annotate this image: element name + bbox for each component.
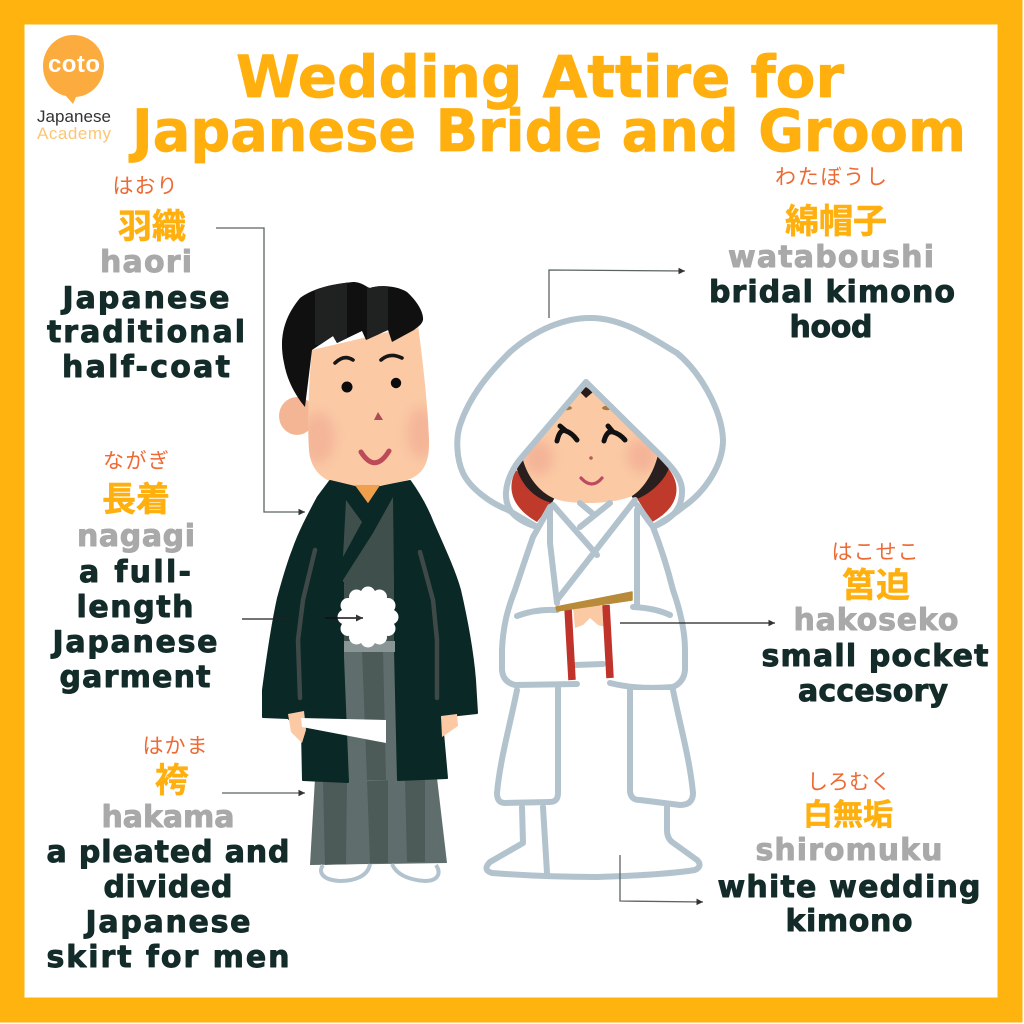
label: haori: Japanese	[60, 281, 230, 316]
label: hakama: 袴	[155, 753, 189, 802]
label: wataboushi: わたぼうし	[775, 161, 887, 191]
label: haori: はおり	[112, 170, 178, 200]
groom lower hakama	[310, 778, 447, 865]
groom hands and white fan	[288, 711, 458, 743]
label: shiromuku: white wedding	[718, 870, 980, 905]
bride wataboushi hood	[457, 318, 723, 527]
groom hair	[282, 280, 423, 407]
label: haori	[47, 170, 245, 385]
label: hakama	[46, 730, 290, 975]
illustration: groom	[263, 280, 477, 881]
bride face	[523, 384, 658, 503]
label: nagagi: nagagi	[77, 519, 195, 554]
label: nagagi: Japanese	[50, 625, 218, 660]
label: haori: 羽織	[118, 199, 186, 248]
label: hakoseko: small pocket	[762, 639, 988, 674]
logo: coto Japanese Academy	[37, 35, 112, 143]
label: wataboushi: 綿帽子	[785, 194, 887, 243]
label: nagagi: length	[76, 590, 194, 625]
groom face	[308, 326, 430, 486]
label: wataboushi	[709, 161, 955, 345]
title	[128, 43, 966, 165]
label: hakama: はかま	[142, 730, 208, 760]
groom ear	[279, 397, 315, 435]
label: nagagi: 長着	[102, 472, 170, 521]
label: wataboushi: bridal kimono	[709, 275, 955, 310]
label: hakoseko	[762, 536, 988, 709]
leader line: shiromuku	[620, 855, 703, 902]
leader line: nagagi	[242, 618, 363, 619]
logo: coto Japanese Academy: Japanese	[37, 107, 111, 126]
groom band under crest	[344, 641, 395, 652]
bride white kimono outline	[486, 500, 700, 877]
label: nagagi: garment	[60, 660, 210, 695]
logo: coto Japanese Academy: Academy	[37, 124, 112, 143]
label: hakama: hakama	[102, 800, 234, 835]
label: nagagi: ながぎ	[103, 445, 169, 475]
title: Wedding Attire for	[236, 43, 844, 111]
label: haori: half-coat	[62, 350, 230, 385]
label: hakoseko: hakoseko	[794, 603, 958, 638]
label: shiromuku: しろむく	[807, 766, 891, 796]
groom white crest	[338, 586, 398, 648]
leader line: hakoseko	[620, 622, 775, 624]
label: haori: haori	[100, 245, 192, 280]
leader line: hakama	[222, 792, 305, 794]
bride hood opening outline	[506, 382, 682, 527]
groom shoes	[321, 864, 439, 881]
label: haori: traditional	[47, 315, 245, 350]
bride red lining and hair	[511, 450, 676, 522]
label: nagagi	[50, 445, 218, 695]
label: shiromuku: kimono	[786, 904, 912, 939]
label: hakama: skirt for men	[46, 940, 290, 975]
leader line: haori	[216, 228, 305, 512]
label: shiromuku: shiromuku	[756, 833, 942, 868]
bride hakoseko and cords	[556, 592, 632, 680]
leader line: wataboushi	[549, 270, 685, 318]
groom inner kimono and neck	[342, 485, 398, 782]
label: hakoseko: はこせこ	[832, 536, 918, 566]
label: wataboushi: wataboushi	[728, 240, 934, 275]
label: hakama: a pleated and	[46, 835, 290, 870]
label: hakoseko: accesory	[798, 674, 948, 709]
label: shiromuku	[718, 766, 980, 939]
groom haori coat	[263, 481, 477, 782]
label: nagagi: a full-	[79, 555, 191, 590]
logo: coto Japanese Academy: coto	[48, 51, 100, 78]
label: hakoseko: 筥迫	[842, 558, 910, 607]
label: wataboushi: hood	[790, 310, 872, 345]
label: shiromuku: 白無垢	[803, 790, 893, 834]
label: hakama: Japanese	[84, 905, 250, 940]
label: hakama: divided	[104, 870, 232, 905]
illustration: bride	[457, 318, 723, 877]
title: Japanese Bride and Groom	[128, 97, 966, 165]
